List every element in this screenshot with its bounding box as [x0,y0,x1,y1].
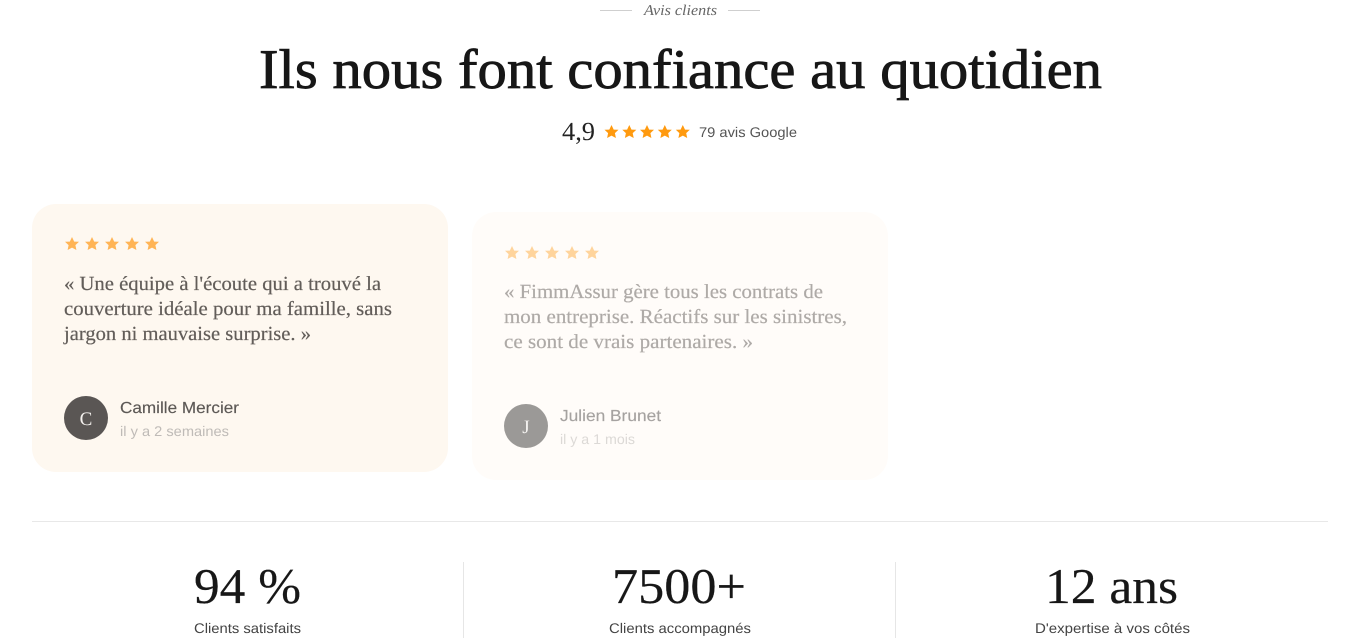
reviewer name: Camille Mercier [120,400,240,417]
rating value: 4,9 [562,117,595,146]
stat: years of expertise: D'expertise à vos côtés [1035,620,1190,636]
stat: clients served: 7500+ [612,558,746,614]
stat: years of expertise [1035,558,1190,636]
review date: il y a 2 semaines [120,423,229,439]
stat: satisfied clients: Clients satisfaits [194,620,301,636]
quote text [504,281,847,353]
avatar C: C [80,409,92,430]
stat: years of expertise: 12 ans [1045,558,1178,614]
panel: review card Julien Brunet [472,212,888,480]
review date: il y a 1 mois [560,431,635,447]
review count: 79 avis Google [699,124,797,140]
icon: card stars [65,237,159,250]
header section [259,3,1102,146]
stat: satisfied clients: 94 % [194,558,301,614]
panel: review card Camille Mercier [32,204,448,472]
quote text [63,273,392,345]
stat: clients served: Clients accompagnés [609,620,751,636]
quote text: couverture idéale pour ma famille, sans [64,298,392,320]
reviewer name: Julien Brunet [560,408,662,425]
quote text: « FimmAssur gère tous les contrats de [504,281,823,303]
stat: satisfied clients [194,558,301,636]
stat: clients served [609,558,751,636]
avatar J [504,404,548,448]
avatar J: J [522,417,530,438]
icon: faded card stars [505,246,599,259]
eyebrow: Avis clients: Avis clients [643,3,717,19]
title: Ils nous font confiance au quotidien [259,39,1102,101]
quote text: « Une équipe à l'écoute qui a trouvé la [64,273,381,295]
icon: five orange stars [604,125,690,138]
quote text: jargon ni mauvaise surprise. » [63,323,311,345]
rating summary [562,117,797,146]
quote text: ce sont de vrais partenaires. » [504,331,753,353]
quote text: mon entreprise. Réactifs sur les sinistres, [504,306,847,328]
avatar C [64,396,108,440]
